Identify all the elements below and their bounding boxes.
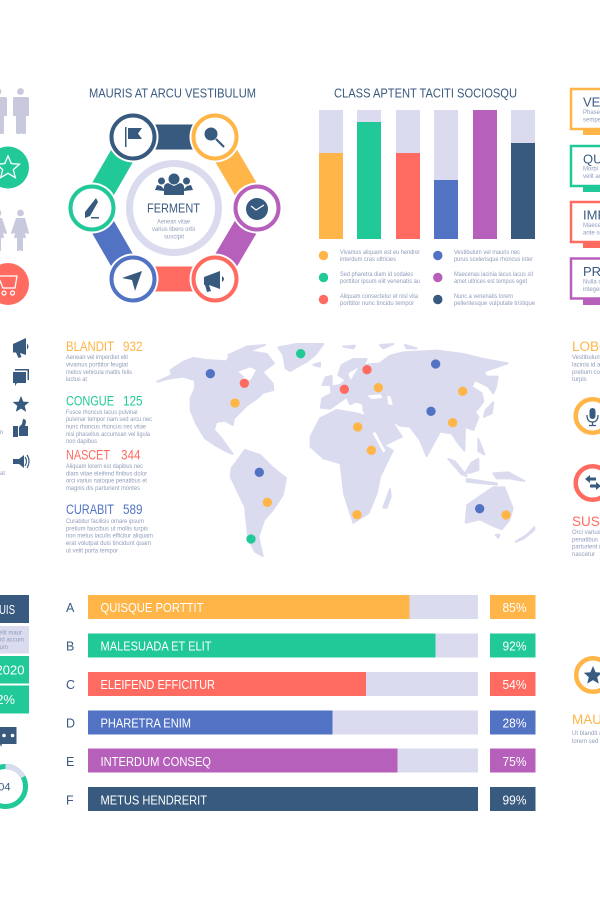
world map (157, 344, 534, 556)
stat: nascet: Aliquam lorem est dapibus nec (66, 464, 143, 470)
heading: bar chart: CLASS APTENT TACITI SOCIOSQU (334, 86, 517, 100)
panel: horizontal bars (66, 595, 536, 811)
stat: curabit: 589 (123, 502, 142, 517)
row C (66, 672, 536, 696)
chart legend: pellentesque vulputate tristique (454, 301, 536, 307)
chart legend: Aliquam consectetur et nisl vita (340, 294, 419, 300)
text: maur: lorem sed (572, 739, 598, 745)
callout: purple (571, 258, 600, 305)
clipped text fragments: at (0, 471, 5, 477)
stat: curabit (66, 502, 153, 554)
percent box (0, 686, 29, 714)
stat: congue: non dapibus (66, 439, 97, 445)
header box (0, 595, 29, 623)
description box (0, 626, 29, 654)
node: navigation arrow (108, 254, 158, 304)
icon: speech bubble (0, 727, 16, 747)
icon: star (13, 396, 29, 412)
callout: red (571, 202, 600, 248)
node: clock (232, 182, 282, 234)
panel: stat list (66, 339, 153, 554)
row F: METUS HENDRERIT (100, 792, 207, 808)
row C: ELEIFEND EFFICITUR (100, 677, 215, 692)
bar chart (319, 110, 535, 239)
stat: congue: nunc rhoncus rhoncus nec vitae (66, 424, 147, 430)
icon: megaphone (13, 338, 28, 358)
heading: hexagon panel: MAURIS AT ARCU VESTIBULUM (89, 86, 256, 100)
panel: hexagon diagram (66, 112, 282, 304)
row E: 75% (502, 754, 527, 769)
chart legend: Sed pharetra diam id sodales (340, 272, 413, 278)
row D: D (66, 716, 75, 730)
row D: PHARETRA ENIM (100, 716, 191, 730)
clipped text fragments (0, 430, 5, 477)
node: magnifier (190, 112, 240, 162)
row A: 85% (502, 600, 527, 615)
row C: C (66, 678, 75, 692)
stat: congue (66, 394, 152, 445)
row D (66, 710, 536, 734)
icon: people group (155, 174, 193, 195)
icon: thumbs up (13, 419, 28, 437)
callout: green (571, 146, 600, 192)
panel: left icon column (13, 338, 29, 468)
chart legend: Nunc a venenatis lorem (454, 294, 513, 300)
row B: MALESUADA ET ELIT (100, 638, 212, 654)
text: lobo: turpis (572, 377, 587, 383)
chart legend: Vivamus aliquam est eu hendrer (340, 250, 420, 256)
chart legend (319, 250, 536, 307)
panel: right column middle (572, 339, 600, 745)
row B: B (66, 640, 74, 654)
hub text: varius libero orbi (152, 227, 195, 233)
chart legend: amet ultrices est tempus eget (454, 279, 527, 285)
stat: congue: 125 (123, 394, 142, 408)
node: flag (108, 112, 158, 162)
stat: congue: pulvinar tempor nam sed arcu nec (66, 417, 152, 423)
icon: red cart badge (0, 263, 29, 305)
stat: blandit: Aenean vel imperdiet elit (66, 355, 128, 361)
stat: nascet: NASCET (66, 448, 110, 462)
chart legend: purus scelerisque rhoncus inter (454, 257, 533, 263)
node: pen (66, 182, 118, 234)
stat: curabit: pretium faucibus ut mollis turpis (66, 526, 148, 532)
icon: female figures (0, 210, 29, 251)
panel: left lower (0, 595, 29, 806)
icon: chat (13, 369, 29, 386)
row D: 28% (502, 716, 527, 730)
hub text: suscipit (164, 234, 184, 240)
hub text: Aenean vitae (157, 220, 191, 226)
stat: blandit: 932 (123, 339, 142, 354)
stat: congue: Fusce rhoncus lacus pulvinar (66, 410, 138, 416)
row F: 99% (502, 792, 527, 808)
row F (66, 787, 536, 811)
description box: id accum (0, 638, 24, 644)
chart legend: porttitor nunc tincidu tempor (340, 301, 414, 307)
icon: speaker (13, 455, 29, 468)
node: megaphone (190, 254, 240, 304)
row B (66, 634, 536, 658)
row E: E (66, 755, 74, 769)
stat: blandit: vivamus porttitor feugiat (66, 362, 128, 368)
row A: QUISQUE PORTTIT (100, 600, 204, 615)
row E: INTERDUM CONSEQ (100, 754, 211, 769)
chart legend: porttitor ipsum elit venenatis au (340, 279, 420, 285)
stat: blandit (66, 339, 142, 383)
stat: blandit: BLANDIT (66, 339, 114, 354)
stat: nascet (66, 448, 147, 492)
row C: 54% (502, 677, 527, 692)
row E (66, 748, 536, 772)
text: susp: nascetur (572, 552, 595, 558)
icon: arrows ring (576, 466, 600, 500)
markers (206, 349, 511, 544)
stat: curabit: non metus iaculis efficitur aliquam (66, 534, 153, 540)
stat: congue: CONGUE (66, 394, 114, 408)
clipped text fragments: n (0, 430, 3, 436)
stat: nascet: magnis dis parturient montes (66, 486, 140, 492)
stat: blandit: luctus at (66, 377, 87, 383)
callout: orange (571, 89, 600, 135)
text: susp (572, 514, 600, 558)
stat: curabit: Curabitur facilisis ornare ipsum (66, 519, 144, 525)
stat: nascet: orci varius natoque penatibus et (66, 479, 147, 485)
hub text (152, 220, 195, 240)
stat: curabit: CURABIT (66, 502, 114, 517)
text: maur (572, 712, 600, 745)
icon: green star badge (0, 146, 29, 188)
panel: left pictograms (0, 88, 29, 305)
row A (66, 595, 536, 619)
stat: curabit: ut velit porta tempor (66, 548, 118, 554)
centre hub (130, 164, 218, 252)
donut chart (0, 766, 26, 806)
continents (157, 344, 534, 556)
row F: F (66, 794, 74, 808)
row A: A (66, 601, 75, 615)
icon: star ring (576, 658, 600, 692)
stat: blandit: metus vehicula mattis felis (66, 370, 132, 376)
row B: 92% (502, 638, 527, 654)
date box (0, 656, 29, 684)
chart legend: interdum cras ultricies (340, 257, 396, 263)
seas and lakes (230, 367, 393, 453)
icon: microphone ring (576, 399, 600, 433)
stat: curabit: erat volutpat duis tincidunt quam (66, 541, 151, 547)
icon: male figures (0, 88, 29, 134)
stat: nascet: 344 (121, 448, 141, 462)
stat: nascet: diam vitae eleifend finibus dolor (66, 471, 147, 477)
hub label: FERMENT (147, 200, 200, 216)
chart legend: Maecenas lacinia lacus lacus sit (454, 272, 533, 278)
chart legend: Vestibulum vel mauris nec (454, 250, 520, 256)
stat: congue: nisi phasellus accumsan vel ligula (66, 432, 151, 438)
text: lobo (572, 339, 600, 383)
connectors (92, 137, 257, 279)
panel: right callouts (571, 89, 600, 305)
